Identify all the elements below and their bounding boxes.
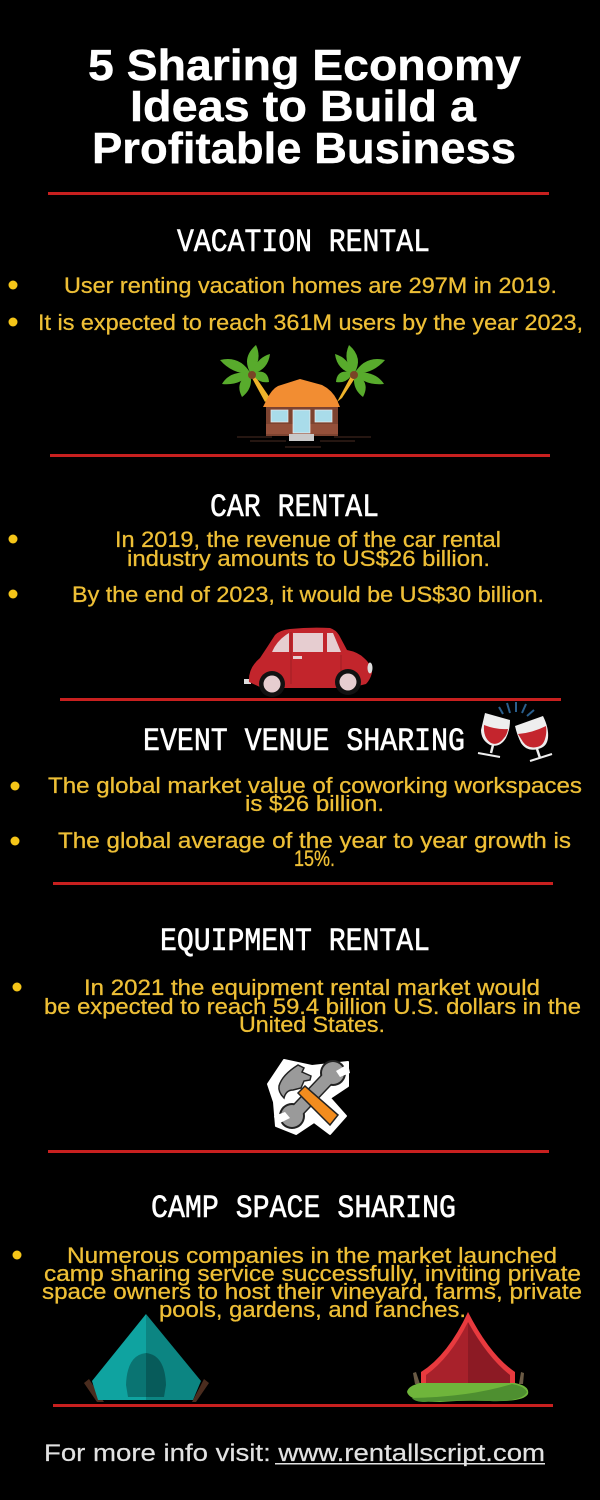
icon: teal tent: [84, 1314, 209, 1402]
bullet list: event venue sharing: [10, 773, 582, 871]
panel: event venue sharing: [10, 702, 582, 871]
bullet list: event venue sharing: The global average of the year to year growth is: [58, 828, 571, 853]
panel: equipment rental: [12, 923, 581, 1134]
bullet list: vacation rental: [8, 273, 583, 335]
heading: vacation rental: VACATION RENTAL: [177, 224, 430, 261]
title: Profitable Business: [92, 124, 516, 173]
panel: camp space sharing: [12, 1190, 582, 1402]
panel: car rental: [8, 489, 544, 697]
bullet list: vacation rental: User renting vacation homes are 297M in 2019.: [64, 273, 557, 298]
title: Ideas to Build a: [130, 82, 477, 131]
bullet list: camp space sharing: pools, gardens, and ranches.: [159, 1297, 466, 1322]
bullet list: car rental: industry amounts to US$26 billion.: [127, 546, 490, 571]
icon: hammer and wrench: [268, 1060, 350, 1134]
bullet list: equipment rental: In 2021 the equipment rental market would: [84, 975, 540, 1000]
bullet list: camp space sharing: camp sharing service successfully, inviting private: [44, 1261, 581, 1286]
icon: beach house with palm trees: [220, 345, 385, 447]
bullet list: car rental: In 2019, the revenue of the car rental: [115, 527, 501, 552]
bullet list: camp space sharing: space owners to host their vineyard, farms, private: [42, 1279, 582, 1304]
heading: equipment rental: EQUIPMENT RENTAL: [160, 923, 430, 960]
icon: wine glasses: [478, 702, 552, 761]
bullet list: event venue sharing: 15%.: [294, 846, 335, 871]
icon: red tent on grass: [407, 1312, 528, 1402]
title: 5 Sharing Economy: [88, 41, 522, 90]
bullet list: equipment rental: United States.: [239, 1012, 385, 1037]
bullet list: equipment rental: be expected to reach 59.4 billion U.S. dollars in the: [44, 994, 581, 1019]
title: [88, 41, 522, 173]
icon: red car: [244, 628, 372, 697]
panel: vacation rental: [8, 224, 583, 447]
heading: car rental: CAR RENTAL: [210, 489, 379, 526]
bullet list: car rental: By the end of 2023, it would be US$30 billion.: [72, 582, 544, 607]
bullet list: camp space sharing: Numerous companies in the market launched: [67, 1243, 557, 1268]
bullet list: event venue sharing: is $26 billion.: [245, 791, 384, 816]
heading: camp space sharing: CAMP SPACE SHARING: [151, 1190, 456, 1227]
bullet list: equipment rental: [12, 975, 581, 1037]
bullet list: camp space sharing: [12, 1243, 582, 1322]
heading: event venue sharing: EVENT VENUE SHARING: [143, 723, 465, 760]
bullet list: vacation rental: It is expected to reach 361M users by the year 2023,: [38, 310, 583, 335]
footer: more info link: For more info visit: www.rentallscript.com: [44, 1440, 545, 1467]
bullet list: event venue sharing: The global market value of coworking workspaces: [48, 773, 582, 798]
bullet list: car rental: [8, 527, 544, 607]
